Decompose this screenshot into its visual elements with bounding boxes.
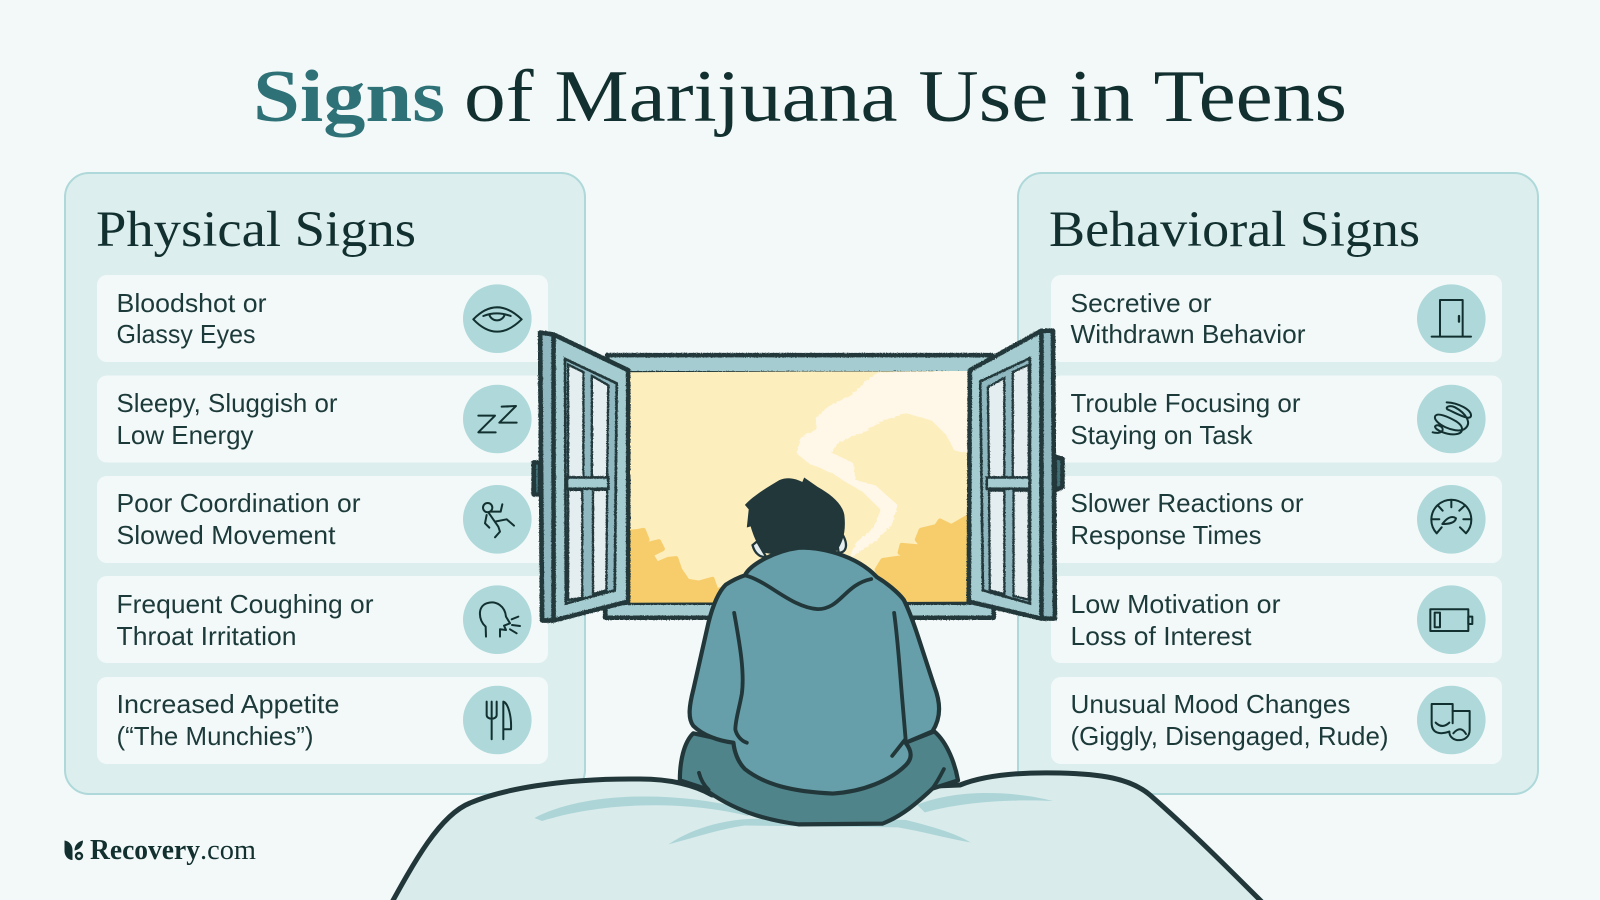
left icons bbox=[473, 307, 522, 739]
icon: eye bbox=[473, 307, 522, 332]
row: poor coordination: Slowed Movement bbox=[116, 520, 336, 550]
row: increased appetite: (“The Munchies”) bbox=[116, 721, 314, 751]
row: trouble focusing: Staying on Task bbox=[1070, 420, 1253, 450]
bed bbox=[385, 773, 1275, 900]
row: frequent coughing bbox=[97, 576, 548, 663]
smoke cloud bbox=[798, 372, 968, 555]
row: unusual mood changes: (Giggly, Disengaged, Rude) bbox=[1070, 721, 1388, 751]
title: Signs bbox=[253, 56, 445, 138]
row: secretive: Withdrawn Behavior bbox=[1070, 319, 1306, 349]
row: slower reactions: Slower Reactions or bbox=[1070, 488, 1304, 518]
bed shadows bbox=[534, 793, 1053, 844]
row: poor coordination: Poor Coordination or bbox=[116, 488, 361, 518]
row: increased appetite bbox=[97, 677, 548, 764]
row: frequent coughing: Frequent Coughing or bbox=[116, 589, 374, 619]
row: low motivation bbox=[1051, 576, 1502, 663]
hood and sleeve lines bbox=[699, 575, 944, 790]
right shutter bbox=[969, 331, 1062, 619]
row: increased appetite: Increased Appetite bbox=[116, 689, 340, 719]
window frame bbox=[605, 355, 994, 618]
row: unusual mood changes bbox=[1051, 677, 1502, 764]
pants bbox=[680, 731, 958, 824]
clouds bbox=[628, 530, 726, 603]
icon: scribble bbox=[1433, 402, 1471, 434]
icon: door bbox=[1432, 300, 1471, 337]
icon: theater masks bbox=[1432, 704, 1470, 740]
illustration: window, bed and teen bbox=[385, 331, 1275, 900]
icon: stumbling figure bbox=[483, 503, 514, 537]
icon: fork and knife bbox=[487, 702, 511, 739]
heading: physical signs: Physical Signs bbox=[96, 202, 416, 258]
icon: speedometer bbox=[1431, 500, 1471, 533]
panel: behavioral signs bbox=[1018, 173, 1538, 794]
sky view bbox=[628, 371, 968, 603]
row: unusual mood changes: Unusual Mood Changes bbox=[1070, 689, 1350, 719]
ears bbox=[753, 536, 846, 557]
right icons bbox=[1430, 300, 1472, 740]
row: trouble focusing: Trouble Focusing or bbox=[1070, 388, 1301, 418]
row: bloodshot or glassy eyes: Glassy Eyes bbox=[116, 319, 256, 349]
row: secretive bbox=[1051, 275, 1502, 362]
row: slower reactions: Response Times bbox=[1070, 520, 1262, 550]
left shutter bbox=[534, 333, 628, 620]
icon: coughing head bbox=[480, 602, 520, 637]
row: low motivation: Loss of Interest bbox=[1070, 621, 1252, 651]
icon: sleep zz bbox=[478, 406, 517, 432]
title: of Marijuana Use in Teens bbox=[464, 56, 1347, 138]
row: trouble focusing bbox=[1051, 376, 1502, 462]
hair bbox=[745, 477, 845, 555]
wordmark: .com bbox=[200, 835, 256, 866]
logo: Recovery.com bbox=[64, 835, 256, 866]
row: secretive: Secretive or bbox=[1070, 288, 1212, 318]
row: sleepy: Low Energy bbox=[116, 420, 254, 450]
wordmark: Recovery bbox=[90, 835, 200, 866]
row: low motivation: Low Motivation or bbox=[1070, 589, 1281, 619]
teen bbox=[680, 477, 958, 824]
row: slower reactions bbox=[1051, 476, 1502, 563]
row: bloodshot or glassy eyes: Bloodshot or bbox=[116, 288, 267, 318]
row: poor coordination bbox=[97, 476, 548, 563]
row: sleepy: Sleepy, Sluggish or bbox=[116, 388, 338, 418]
row: frequent coughing: Throat Irritation bbox=[116, 621, 296, 651]
row: bloodshot or glassy eyes bbox=[97, 275, 548, 362]
logo mark bbox=[64, 840, 83, 860]
hoodie bbox=[690, 548, 939, 794]
icon: low battery bbox=[1430, 609, 1472, 631]
row: sleepy bbox=[97, 376, 548, 462]
panel: physical signs bbox=[65, 173, 585, 794]
heading: behavioral signs: Behavioral Signs bbox=[1049, 202, 1420, 258]
